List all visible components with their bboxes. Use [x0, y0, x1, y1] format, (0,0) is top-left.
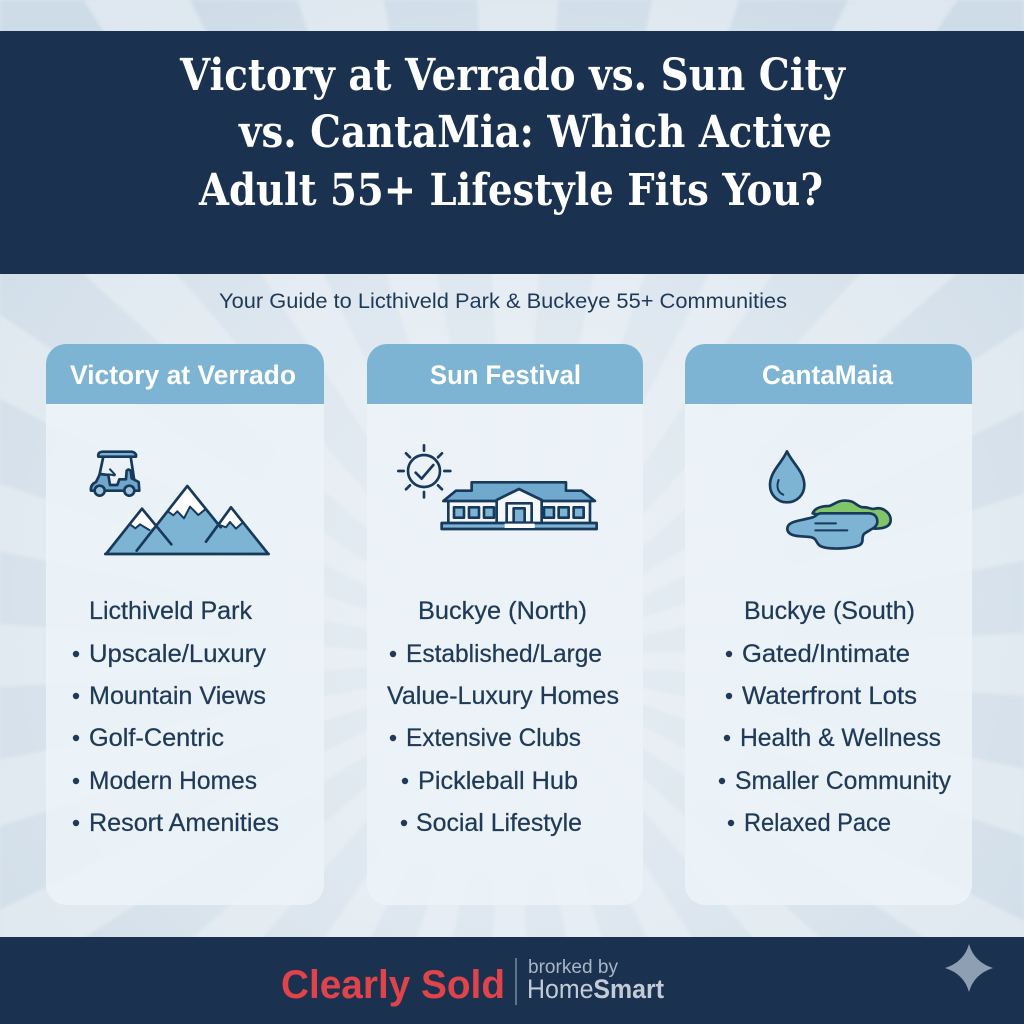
logo: brokered by HomeSmart — [516, 957, 664, 1005]
title: Adult 55+ Lifestyle Fits You? — [198, 165, 823, 216]
card header: Sun Festival: Sun Festival — [430, 360, 581, 390]
feature list: CantaMaia: Buckye (South) — [744, 597, 915, 625]
panel: Victory at Verrado — [46, 344, 324, 905]
icon: sun with check mark — [398, 445, 450, 497]
title: vs. CantaMia: Which Active — [238, 107, 832, 158]
feature list: Victory at Verrado: Resort Amenities — [89, 809, 279, 837]
feature list: Sun Festival: Pickleball Hub — [418, 767, 578, 795]
feature list: Victory at Verrado: Licthiveld Park — [89, 597, 252, 625]
feature list: Sun Festival — [387, 597, 619, 837]
icon: pond with grass — [787, 501, 891, 549]
feature list: Sun Festival: Value-Luxury Homes — [387, 682, 619, 710]
feature list: Victory at Verrado: Upscale/Luxury — [89, 640, 267, 668]
feature list: CantaMaia: Gated/Intimate — [742, 640, 910, 668]
card header: Victory at Verrado — [46, 344, 324, 404]
header banner — [0, 31, 1024, 274]
subtitle: Your Guide to Licthiveld Park & Buckeye 55+ Communities — [219, 290, 787, 313]
logo: brokered by HomeSmart: brorked by — [528, 957, 618, 978]
feature list: CantaMaia — [719, 597, 951, 837]
feature list: Sun Festival: Social Lifestyle — [416, 809, 582, 837]
card header: CantaMaia: CantaMaia — [762, 360, 894, 390]
title: Victory at Verrado vs. Sun City — [179, 50, 846, 101]
feature list: Sun Festival: Established/Large — [406, 640, 602, 668]
feature list: Victory at Verrado: Golf-Centric — [89, 724, 224, 752]
feature list: CantaMaia: Smaller Community — [735, 767, 951, 795]
panel: Sun Festival — [367, 344, 643, 905]
feature list: Victory at Verrado: Mountain Views — [89, 682, 266, 710]
logo: Clearly Sold: Clearly Sold — [281, 963, 505, 1007]
feature list: CantaMaia: Relaxed Pace — [744, 809, 891, 837]
feature list: CantaMaia: Health & Wellness — [740, 724, 941, 752]
feature list: Sun Festival: Buckye (North) — [418, 597, 587, 625]
icon: sparkle star — [945, 944, 993, 992]
card header: Sun Festival — [367, 344, 643, 404]
card header: Victory at Verrado: Victory at Verrado — [70, 360, 296, 390]
logo: brokered by HomeSmart: HomeSmart — [527, 974, 664, 1004]
feature list: Victory at Verrado — [73, 597, 279, 837]
feature list: Victory at Verrado: Modern Homes — [89, 767, 257, 795]
card header: CantaMaia — [685, 344, 972, 404]
icon: sun check and clubhouse — [398, 445, 597, 529]
panel: CantaMaia — [685, 344, 972, 905]
icon: golf cart — [91, 452, 139, 496]
icon: water drop — [770, 451, 804, 502]
icon: mountains — [105, 486, 269, 554]
icon: water drop and pond — [770, 451, 891, 549]
icon: golf cart and mountains — [91, 452, 269, 554]
feature list: CantaMaia: Waterfront Lots — [742, 682, 917, 710]
title — [179, 50, 846, 216]
icon: clubhouse — [442, 482, 597, 529]
feature list: Sun Festival: Extensive Clubs — [406, 724, 581, 752]
footer bar — [0, 937, 1024, 1024]
